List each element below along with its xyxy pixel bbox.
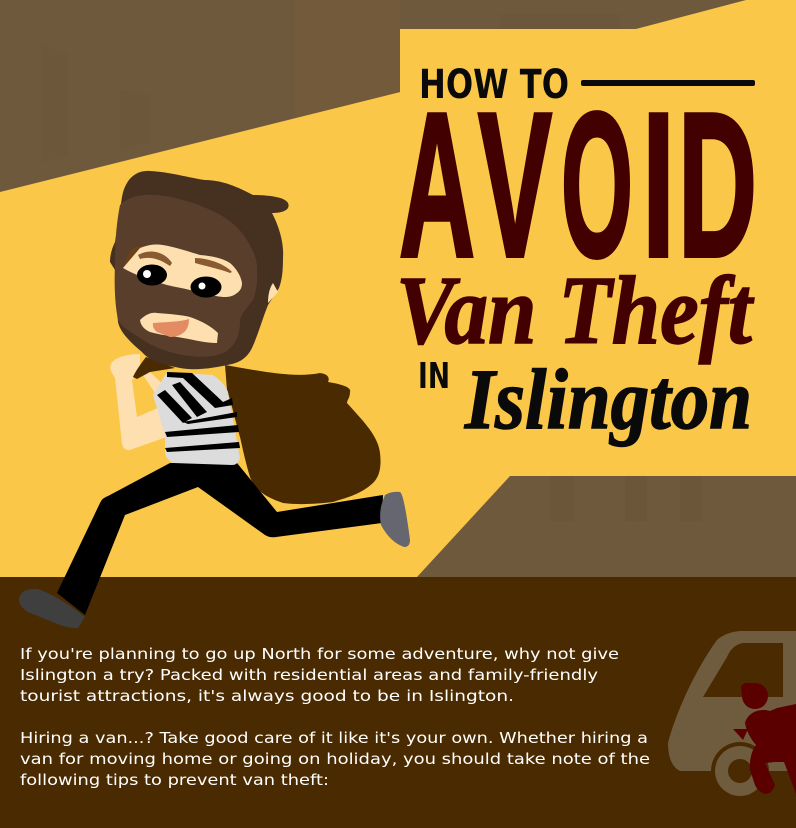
illustration: running thief with sack <box>19 171 410 628</box>
sack <box>225 365 381 504</box>
title: van theft: Van Theft <box>396 257 755 364</box>
mouth <box>140 313 218 343</box>
striped shirt <box>153 372 240 465</box>
arm <box>110 354 178 450</box>
sack neck in hand <box>133 357 175 379</box>
shoe: back <box>380 492 410 547</box>
second arm <box>143 372 167 393</box>
hood outer <box>110 171 289 369</box>
face opening <box>123 244 242 297</box>
dark brown text band <box>0 577 796 828</box>
title: in: IN <box>418 356 450 397</box>
hair fringe <box>124 245 158 266</box>
paragraph two <box>20 729 650 789</box>
title: avoid: O <box>561 70 633 300</box>
hood inner <box>115 195 257 357</box>
paragraph one <box>20 645 619 705</box>
title: islington: Islington <box>464 351 752 447</box>
paragraph two: Hiring a van...? Take good care of it like it's your own. Whether hiring a <box>20 729 648 747</box>
paragraph two: following tips to prevent van theft: <box>20 771 329 789</box>
intro text <box>20 645 650 789</box>
title: avoid: V <box>478 70 552 300</box>
paragraph one: Islington a try? Packed with residential areas and family-friendly <box>20 666 598 684</box>
title: avoid: A <box>399 70 475 300</box>
icon: thief breaking into car <box>668 631 796 800</box>
title: avoid: I <box>642 70 675 300</box>
top brown photo banner <box>0 0 746 192</box>
paragraph one: tourist attractions, it's always good to be in Islington. <box>20 687 514 705</box>
paragraph one: If you're planning to go up North for some adventure, why not give <box>20 645 619 663</box>
shoe: front <box>19 589 85 628</box>
bottom right brown photo banner <box>417 476 796 577</box>
car body <box>668 631 796 771</box>
title <box>396 62 757 447</box>
legs <box>57 463 383 615</box>
shirt stripes <box>157 372 240 452</box>
eyes <box>137 264 167 286</box>
wheel <box>711 742 769 800</box>
tongue <box>153 319 189 337</box>
eyebrows <box>138 252 232 273</box>
thief silhouette <box>733 683 796 794</box>
paragraph two: van for moving home or going on holiday, you should take note of the <box>20 750 650 768</box>
ear <box>268 283 278 303</box>
title rule <box>581 80 755 86</box>
title: how to: HOW TO <box>419 62 569 108</box>
